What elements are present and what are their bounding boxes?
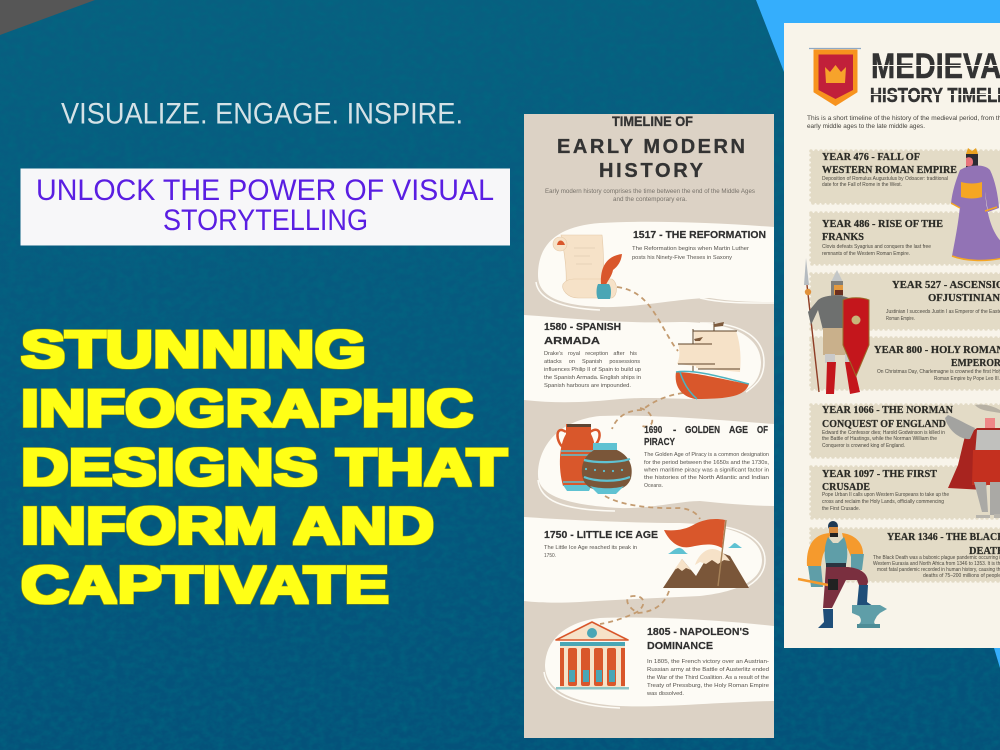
entry: year 1346 — [873, 531, 1000, 579]
entry: year 527: Roman Empire. — [886, 316, 915, 322]
poster intro: and the contemporary era. — [613, 196, 687, 203]
entry: 1580: the Spanish Armada. English ships in — [544, 375, 641, 381]
band: 1517 — [536, 222, 774, 310]
entry: 1750 — [544, 529, 658, 559]
poster heading: TIMELINE OF — [612, 114, 693, 129]
entry: 1690: OF — [757, 425, 768, 436]
main title: STUNNING — [21, 321, 366, 379]
entry: year 476: YEAR 476 - FALL OF — [822, 151, 920, 163]
main title — [21, 321, 507, 615]
entry: year 1066: YEAR 1066 - THE NORMAN — [822, 404, 953, 416]
entry: year 1066: Conqueror is crowned king of England. — [822, 443, 905, 449]
entry: 1750: 1750 - LITTLE ICE AGE — [544, 529, 658, 541]
icon: soldier figure — [804, 258, 869, 394]
entry: 1580: attacks on Spanish possessions — [544, 359, 640, 365]
icon: scroll, quill and ink — [553, 235, 622, 299]
entry: year 476 — [822, 151, 957, 188]
entry: 1580: Drake's royal reception after his — [544, 351, 637, 357]
main title: DESIGNS THAT — [21, 439, 507, 497]
entry: year 1097: the First Crusade. — [822, 506, 860, 512]
band: 1580 — [524, 315, 764, 402]
scalloped panels — [811, 151, 1000, 581]
main title: CAPTIVATE — [21, 557, 389, 615]
entry: 1517: posts his Ninety-Five Theses in Saxony — [632, 255, 732, 261]
entry: year 1066: the Battle of Hastings, while the Norman William the — [822, 436, 937, 442]
entry: 1690 — [643, 425, 769, 489]
entry: year 1066 — [822, 404, 953, 449]
poster intro — [807, 116, 1000, 130]
entry: year 486: YEAR 486 - RISE OF THE — [822, 218, 943, 230]
entry: 1805: Russian army at the Battle of Austerlitz ended — [647, 667, 769, 673]
entry: 1517 — [632, 229, 766, 261]
icon: blacksmith figure — [798, 521, 887, 628]
entry: 1517: 1517 - THE REFORMATION — [633, 229, 766, 241]
tagline: VISUALIZE. ENGAGE. INSPIRE. — [61, 98, 463, 130]
entry: 1805: the War of the Third Coalition. As a result of the — [647, 675, 769, 681]
main title: INFOGRAPHIC — [21, 380, 473, 438]
poster heading: EARLY MODERN — [557, 136, 745, 158]
poster intro: This is a short timeline of the history of the medieval period, from the — [807, 116, 1000, 122]
entry: year 1346: deaths of 75–200 millions of people — [923, 573, 1000, 579]
entry: 1580: ARMADA — [544, 335, 600, 347]
entry: year 486: FRANKS — [822, 231, 864, 243]
entry: 1805 — [646, 626, 769, 697]
entry: year 476: Deposition of Romulus Augustulus by Odoacer: traditional — [822, 176, 948, 182]
icon: mountains and flag — [663, 519, 749, 588]
dashed route — [600, 287, 700, 624]
light blue background shape — [756, 0, 1000, 668]
subtitle box: UNLOCK THE POWER OF VISUAL — [36, 174, 494, 207]
entry: year 1097: CRUSADE — [822, 481, 870, 493]
panel: medieval history poster — [784, 23, 1000, 648]
icon: queen figure — [951, 148, 1000, 260]
poster intro: Early modern history comprises the time between the end of the Middle Ages — [545, 188, 755, 195]
main title: INFORM AND — [21, 498, 434, 556]
poster heading — [557, 114, 745, 182]
entry: 1750: The Little Ice Age reached its peak in — [544, 545, 637, 551]
entry: year 486 — [822, 218, 943, 257]
band: 1750 — [524, 517, 765, 603]
icon: heraldic shield — [809, 48, 861, 106]
entry: 1805: was dissolved. — [646, 691, 684, 697]
icon: temple — [556, 622, 629, 690]
entry: 1690: AGE — [729, 425, 748, 436]
icon: vases — [557, 424, 632, 494]
entry: 1690: - — [673, 425, 676, 436]
subtitle box — [20, 168, 510, 246]
entry: 1690: the histories of the North Atlantic and Indian — [644, 475, 769, 481]
entry: year 476: date for the Fall of Rome in the West. — [822, 182, 902, 188]
entry: 1690: GOLDEN — [685, 425, 720, 436]
entry: 1580: 1580 - SPANISH — [544, 321, 621, 333]
entry: 1805: 1805 - NAPOLEON'S — [647, 626, 749, 638]
entry: 1805: In 1805, the French victory over an Austrian- — [647, 659, 769, 665]
entry: 1690: Oceans. — [644, 483, 663, 489]
poster title — [868, 47, 1000, 107]
icon: ship — [676, 322, 749, 399]
poster heading: HISTORY — [599, 160, 704, 182]
entry: 1690: PIRACY — [644, 437, 675, 448]
poster intro: early middle ages to the late middle ages. — [807, 124, 925, 130]
entry: year 1097: Pope Urban II calls upon Western Europeans to take up the — [822, 492, 949, 498]
entry: 1517: The Reformation begins when Martin Luther — [632, 246, 749, 252]
entry: year 476: WESTERN ROMAN EMPIRE — [822, 164, 957, 176]
entry: year 1097: cross and reclaim the Holy Lands, officially commencing — [822, 499, 944, 505]
entry: year 527 — [886, 279, 1000, 322]
entry: year 486: remnants of the Western Roman Empire. — [822, 251, 910, 257]
icon: knight figure — [945, 404, 1000, 518]
poster intro — [545, 188, 755, 203]
gray corner shape — [0, 0, 95, 35]
entry: 1580 — [544, 321, 641, 389]
entry: year 1066: Edward the Confessor dies; Harold Godwinson is killed in — [822, 430, 945, 436]
band: 1690 — [538, 416, 774, 511]
entry: year 486: Clovis defeats Syagrius and conquers the last free — [822, 244, 931, 250]
entry: 1580: Spanish harbours are impounded. — [544, 383, 631, 389]
entry: 1690: 1690 — [644, 425, 663, 436]
entry: 1580: influences Philip II of Spain to build up — [544, 367, 641, 373]
entry: year 1066: CONQUEST OF ENGLAND — [822, 418, 946, 430]
entry: 1805: Treaty of Pressburg, the Holy Roman Empire — [647, 683, 769, 689]
entry: 1690: when maritime piracy was a significant factor in — [643, 468, 769, 474]
entry: 1805: DOMINANCE — [647, 640, 713, 652]
entry: year 1097 — [822, 468, 949, 512]
entry: 1750: 1750. — [544, 553, 556, 559]
entry: 1690: for the period between the 1650s and the 1730s, — [644, 460, 769, 466]
entry: year 800 — [874, 344, 1000, 382]
band: 1805 — [544, 617, 774, 708]
entry: 1690: The Golden Age of Piracy is a common designation — [644, 452, 769, 458]
entry: year 1097: YEAR 1097 - THE FIRST — [822, 468, 938, 480]
subtitle box: STORYTELLING — [163, 204, 368, 237]
panel: early modern history poster — [524, 114, 774, 738]
